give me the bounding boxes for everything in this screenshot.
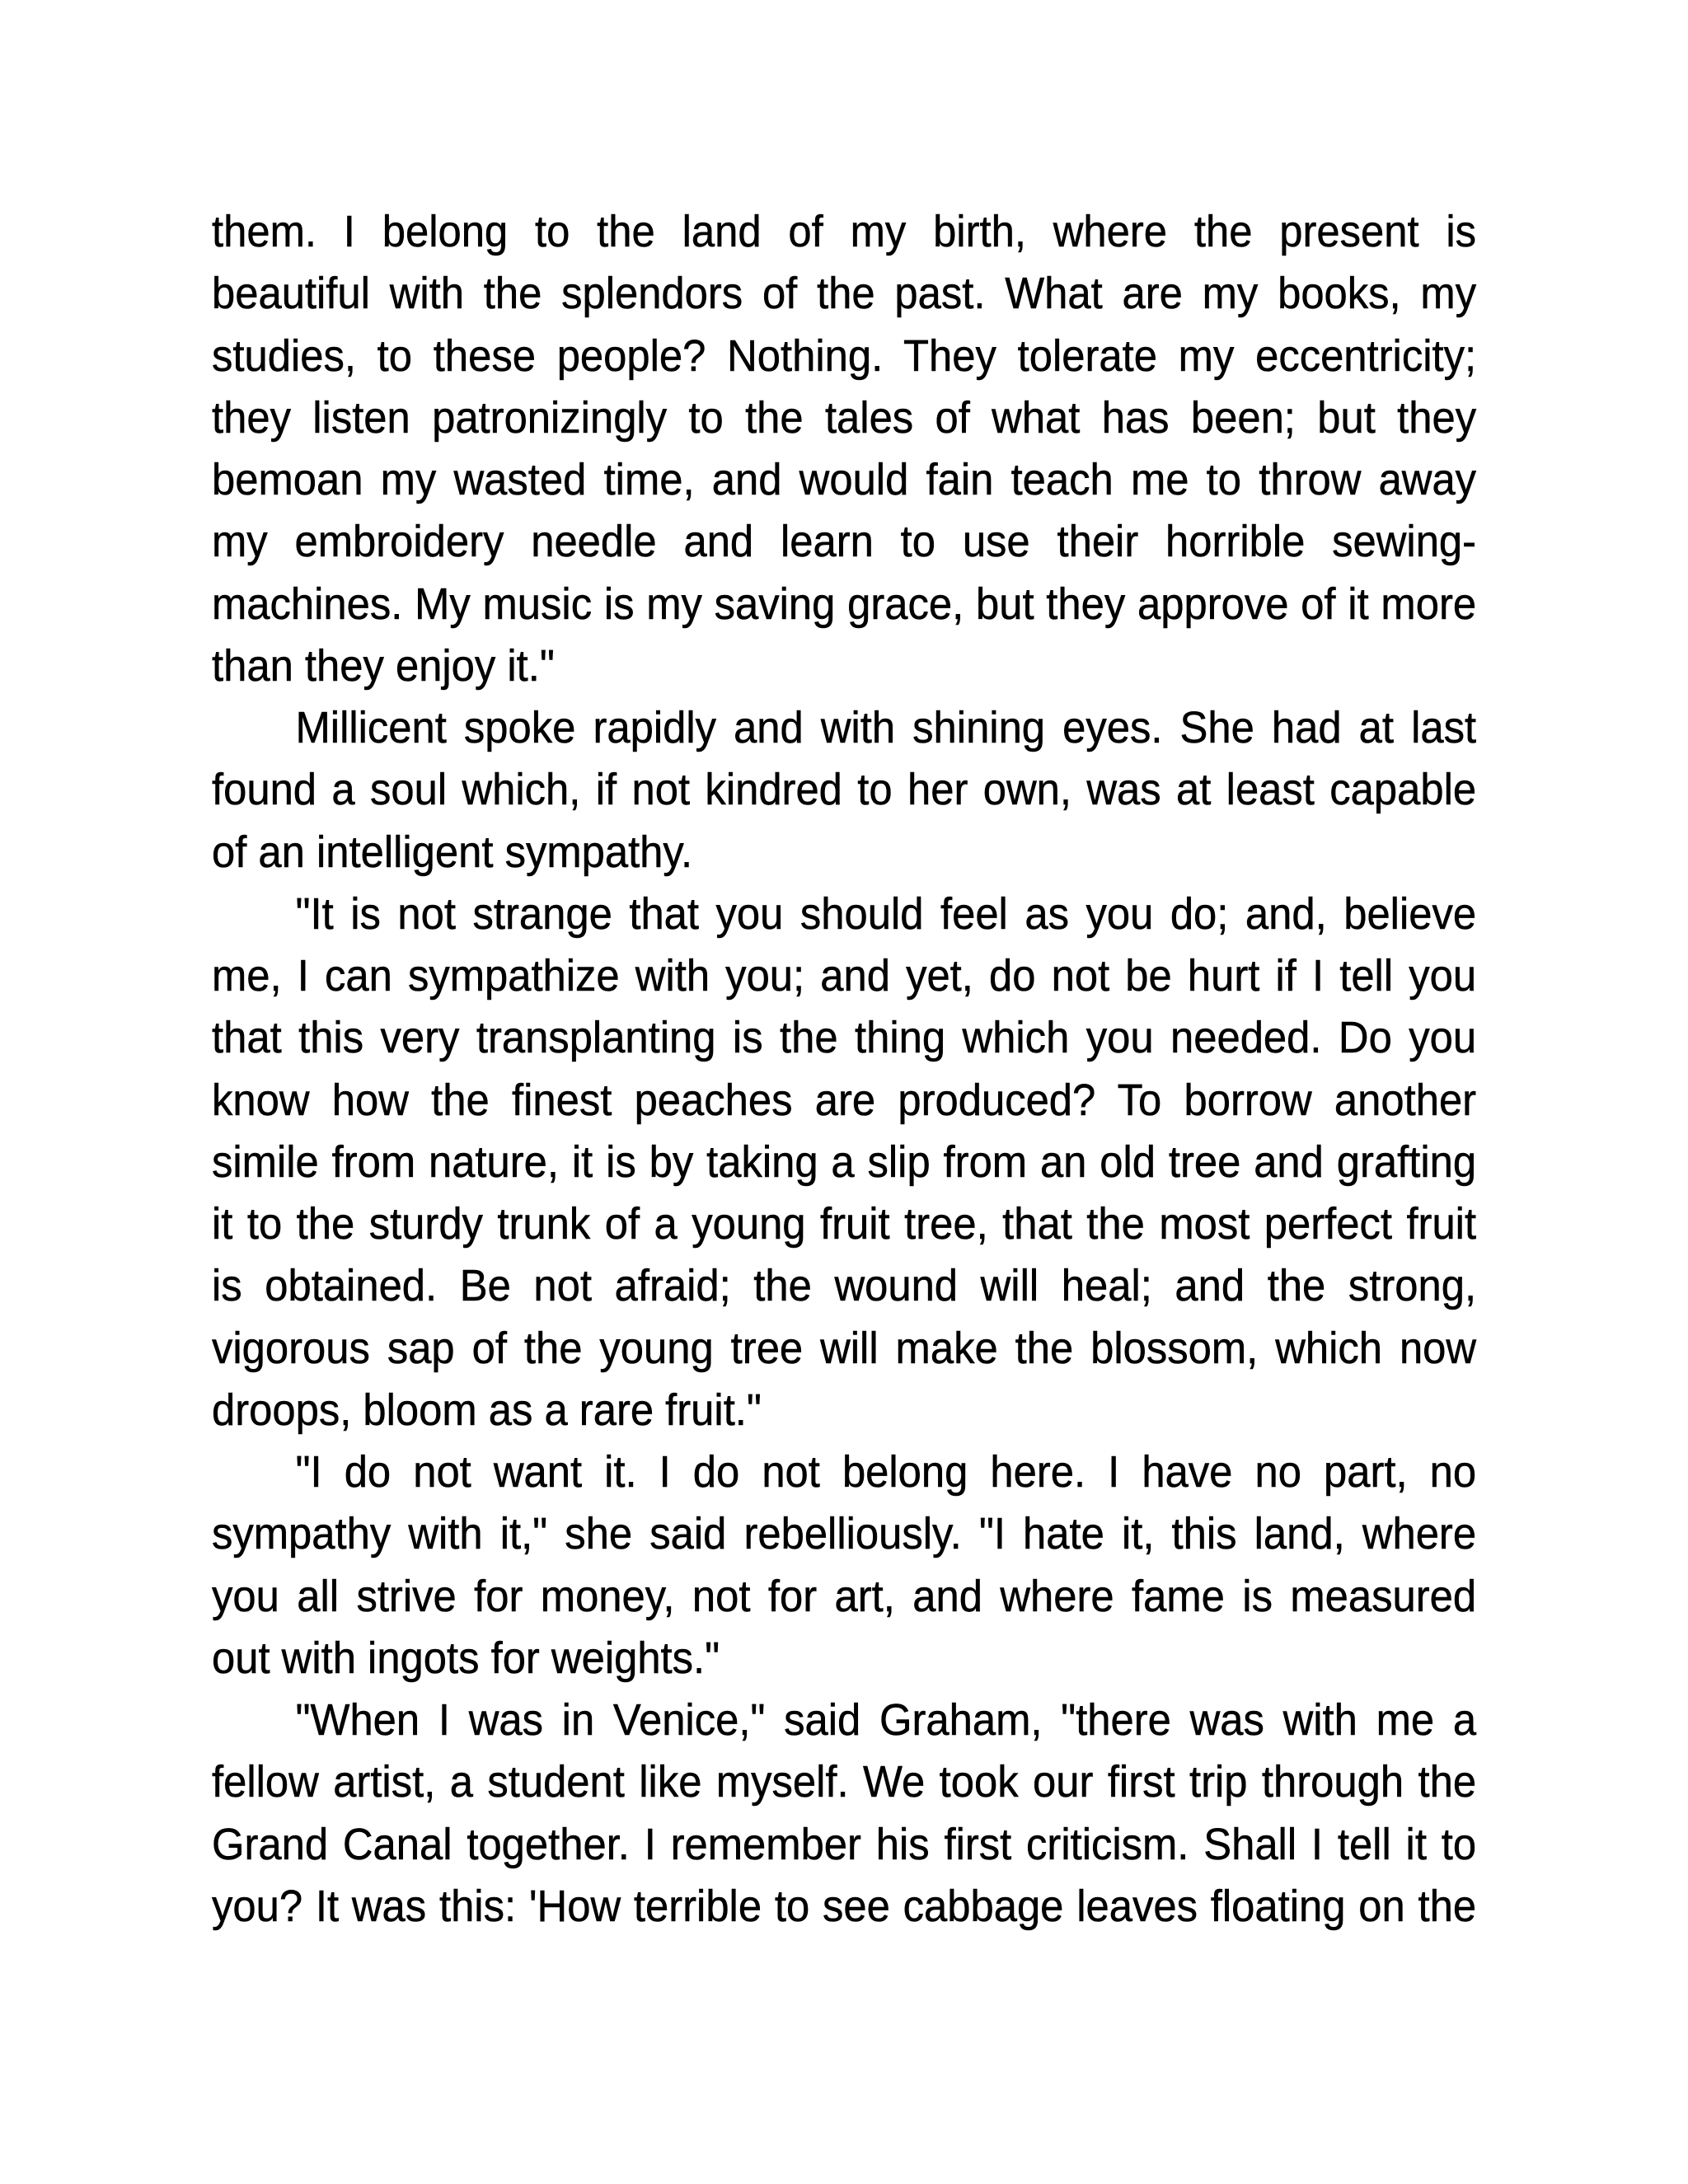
paragraph: It is not strange: "It is not strange that you should feel as you do; and, believe xyxy=(296,889,1476,939)
paragraph: I do not want it: sympathy with it," she said rebelliously. "I hate it, this land, where xyxy=(212,1509,1476,1558)
paragraph: It is not strange: simile from nature, it is by taking a slip from an old tree and grafting xyxy=(212,1137,1476,1187)
paragraph: It is not strange: vigorous sap of the young tree will make the blossom, which now xyxy=(212,1324,1476,1373)
paragraph: When I was in Venice xyxy=(211,1695,1477,1931)
paragraph: It is not strange: it to the sturdy trunk of a young fruit tree, that the most perfect fruit xyxy=(212,1199,1476,1249)
paragraph: them, I belong to the land: beautiful with the splendors of the past. What are my books, my xyxy=(212,269,1476,318)
paragraph: When I was in Venice: fellow artist, a student like myself. We took our first trip through the xyxy=(212,1757,1476,1807)
paragraph: I do not want it xyxy=(211,1447,1476,1683)
paragraph: Millicent spoke rapidly: found a soul which, if not kindred to her own, was at least capable xyxy=(212,765,1476,814)
paragraph: them, I belong to the land: studies, to these people? Nothing. They tolerate my eccentricity; xyxy=(212,331,1476,381)
paragraph: them, I belong to the land xyxy=(212,207,1477,691)
paragraph: I do not want it: out with ingots for weights." xyxy=(212,1633,720,1683)
paragraph: Millicent spoke rapidly: of an intelligent sympathy. xyxy=(212,827,692,877)
paragraph: When I was in Venice: Grand Canal together. I remember his first criticism. Shall I tell it to xyxy=(212,1820,1476,1869)
paragraph: I do not want it: you all strive for money, not for art, and where fame is measured xyxy=(212,1571,1476,1620)
paragraph: them, I belong to the land: bemoan my wasted time, and would fain teach me to throw away xyxy=(212,455,1476,504)
text column xyxy=(211,207,1477,1931)
paragraph: When I was in Venice: you? It was this: 'How terrible to see cabbage leaves floating on the xyxy=(212,1882,1476,1931)
paragraph: When I was in Venice: "When I was in Venice," said Graham, "there was with me a xyxy=(296,1695,1476,1745)
paragraph: them, I belong to the land: my embroidery needle and learn to use their horrible sewing- xyxy=(212,517,1476,566)
paragraph: It is not strange: is obtained. Be not afraid; the wound will heal; and the strong, xyxy=(212,1261,1476,1310)
paragraph: them, I belong to the land: they listen patronizingly to the tales of what has been; but they xyxy=(212,393,1476,443)
paragraph: Millicent spoke rapidly: Millicent spoke rapidly and with shining eyes. She had at last xyxy=(296,703,1476,752)
paragraph: It is not strange: me, I can sympathize with you; and yet, do not be hurt if I tell you xyxy=(212,951,1476,1001)
paragraph: them, I belong to the land: machines. My music is my saving grace, but they approve of it more xyxy=(212,579,1476,628)
paragraph: It is not strange xyxy=(211,889,1477,1435)
paragraph: them, I belong to the land: than they enjoy it." xyxy=(212,641,555,691)
paragraph: It is not strange: that this very transplanting is the thing which you needed. Do you xyxy=(212,1013,1476,1062)
paragraph: I do not want it: "I do not want it. I do not belong here. I have no part, no xyxy=(296,1447,1476,1497)
paragraph: them, I belong to the land: them. I belong to the land of my birth, where the present is xyxy=(212,207,1476,256)
paragraph: It is not strange: droops, bloom as a rare fruit." xyxy=(212,1385,762,1435)
paragraph: Millicent spoke rapidly xyxy=(212,703,1476,877)
paragraph: It is not strange: know how the finest peaches are produced? To borrow another xyxy=(212,1075,1476,1124)
